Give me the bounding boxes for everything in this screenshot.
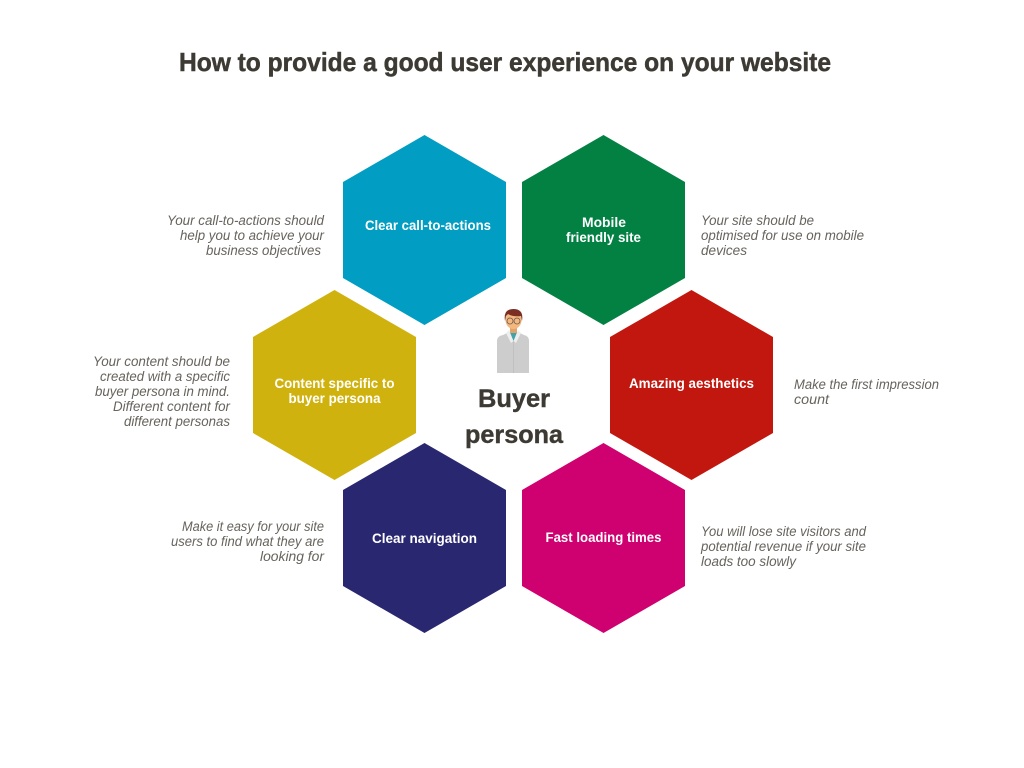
text: mobile description: optimised for use on mobile [701,228,864,243]
text: call-to-actions description: Your call-to-actions should [167,213,324,228]
text: navigation description: users to find what they are [171,534,324,549]
panel: mobile friendly site: friendly site [566,230,641,245]
panel: content specific to buyer persona [253,290,416,480]
text: content description: Different content for [113,399,230,414]
text: mobile description [701,213,864,258]
text: call-to-actions description: business objectives [206,243,321,258]
text: loading description: potential revenue if your site [700,539,866,554]
panel: amazing aesthetics [610,290,773,480]
text: content description: different personas [124,414,230,429]
text: loading description: loads too slowly [701,554,797,569]
panel: content specific to buyer persona: buyer persona [288,391,381,406]
center label: buyer persona [465,385,564,449]
panel: fast loading times: Fast loading times [546,530,662,545]
text: content description: Your content should be [93,354,230,369]
icon: buyer persona man [497,309,529,373]
text: content description: created with a specific [100,369,230,384]
center label: buyer persona: Buyer [478,385,550,413]
text: mobile description: devices [701,243,747,258]
text: loading description [700,524,866,569]
panel: content specific to buyer persona: Content specific to [274,376,394,391]
panel: fast loading times [522,443,685,633]
text: loading description: You will lose site visitors and [701,524,866,539]
text: aesthetics description [794,377,939,407]
panel: clear call-to-actions [343,135,506,325]
text: content description [93,354,230,429]
panel: mobile friendly site [522,135,685,325]
text: navigation description [171,519,325,564]
text: content description: buyer persona in mind. [95,384,230,399]
text: mobile description: Your site should be [701,213,814,228]
center label: buyer persona: persona [465,421,564,449]
text: aesthetics description: count [794,392,830,407]
panel: clear call-to-actions: Clear call-to-actions [365,218,491,233]
text: call-to-actions description [167,213,324,258]
panel: amazing aesthetics: Amazing aesthetics [629,376,754,391]
panel: clear navigation [343,443,506,633]
text: call-to-actions description: help you to achieve your [180,228,324,243]
panel: mobile friendly site: Mobile [582,215,627,230]
text: navigation description: Make it easy for your site [182,519,324,534]
panel: clear navigation: Clear navigation [372,531,477,546]
text: navigation description: looking for [260,549,325,564]
title: How to provide a good user experience on your website [179,47,831,77]
text: aesthetics description: Make the first impression [794,377,939,392]
